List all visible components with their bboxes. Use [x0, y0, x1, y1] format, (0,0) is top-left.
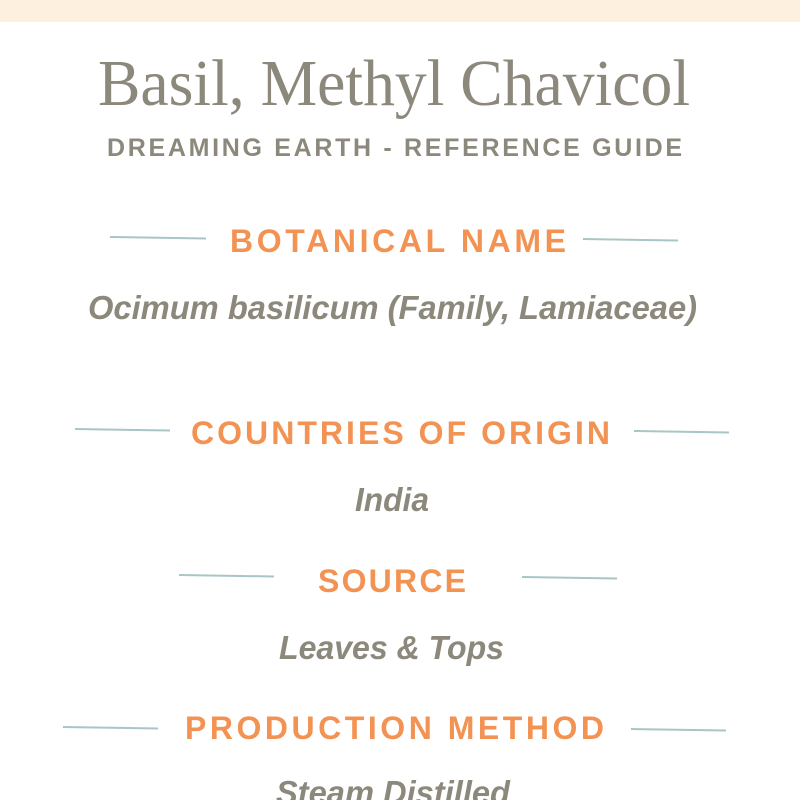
heading: production method: PRODUCTION METHOD	[185, 710, 604, 746]
top cream band	[0, 0, 800, 22]
section: botanical name	[88, 223, 697, 326]
section: countries of origin	[75, 415, 729, 518]
heading: botanical name: BOTANICAL NAME	[230, 223, 566, 259]
heading: countries of origin: COUNTRIES OF ORIGIN	[191, 415, 610, 451]
subtitle: DREAMING EARTH - REFERENCE GUIDE	[107, 134, 682, 162]
text: countries value: India	[355, 481, 429, 518]
title: Basil, Methyl Chavicol	[98, 47, 690, 120]
text: botanical name value: Ocimum basilicum (Family, Lamiaceae)	[88, 289, 697, 326]
text: source value: Leaves & Tops	[279, 629, 504, 666]
heading: source: SOURCE	[318, 563, 466, 599]
section: source	[179, 563, 617, 666]
section: production method	[63, 710, 726, 800]
